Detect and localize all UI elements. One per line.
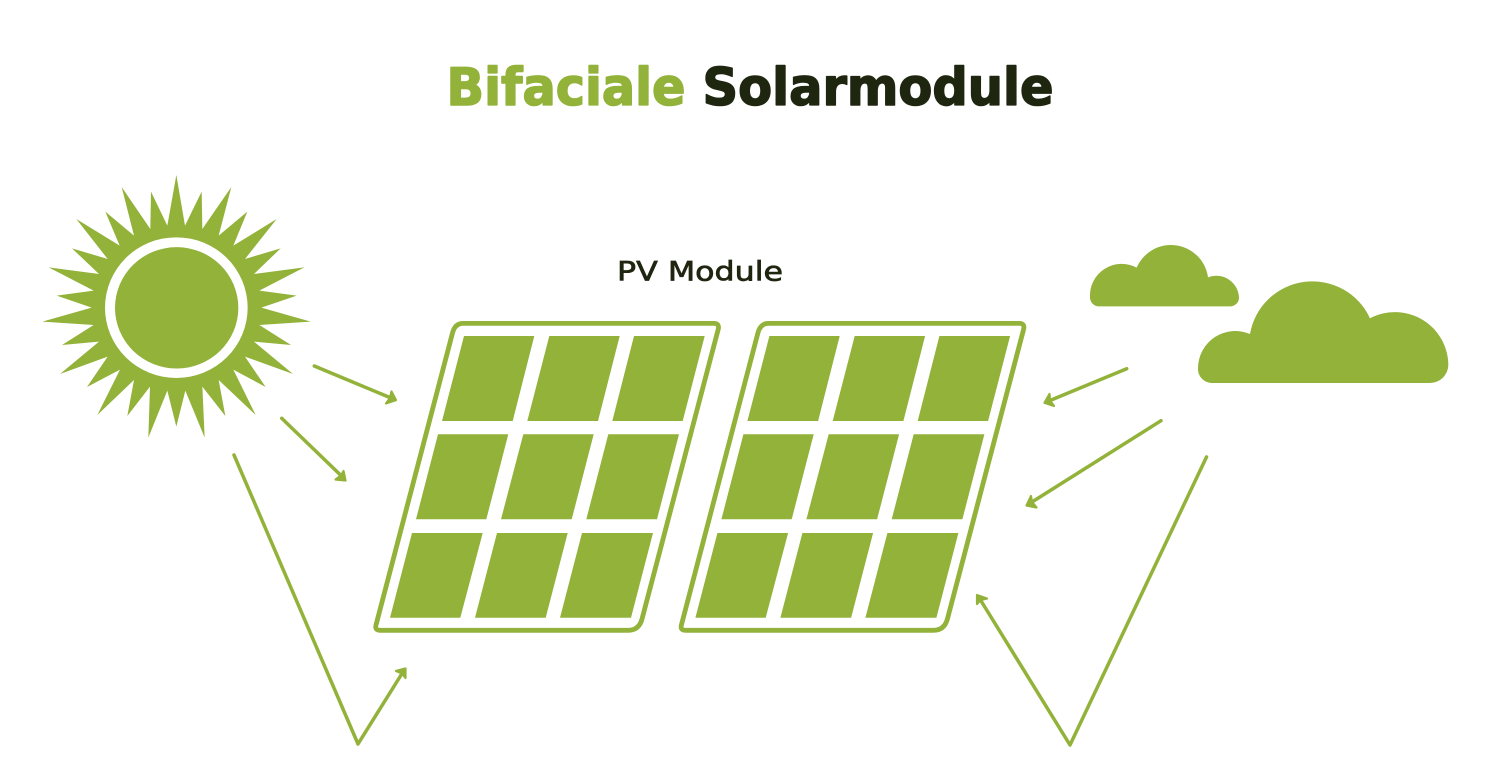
title: Solarmodule: [702, 58, 1054, 118]
title: Bifaciale: [446, 58, 686, 118]
icon: small cloud: [1090, 245, 1239, 306]
arrow: sun reflected from the ground to module rear: [234, 455, 406, 744]
arrow: sun to module top: [314, 366, 396, 404]
arrow: cloud to module top: [1044, 369, 1127, 406]
arrow: sun to module middle: [282, 418, 346, 480]
panel: right PV module: [681, 323, 1024, 630]
icon: large cloud: [1198, 281, 1448, 383]
label: PV Module: PV Module: [617, 256, 783, 288]
panel: left PV module: [376, 323, 719, 630]
icon: sun: [42, 175, 311, 438]
arrow: cloud to module middle: [1026, 421, 1161, 508]
arrow: cloud light reflected from the ground to module: [977, 457, 1206, 745]
